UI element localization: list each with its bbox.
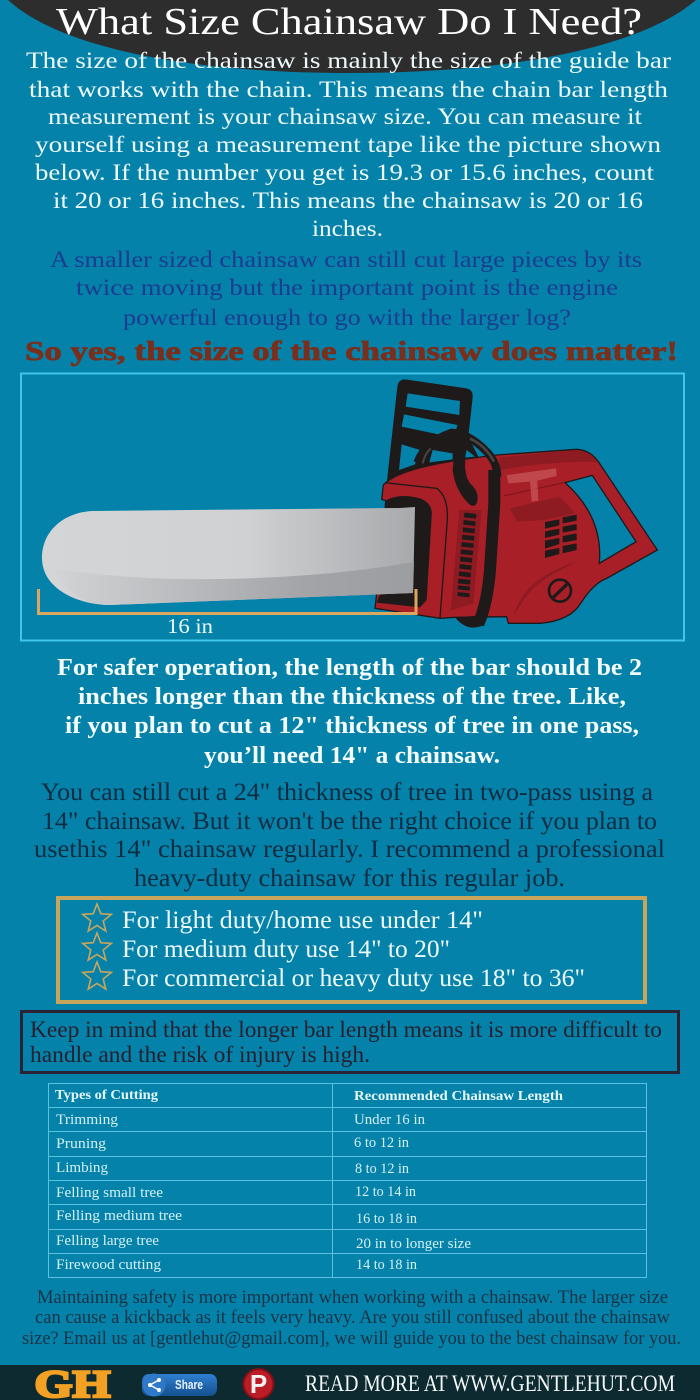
trigger [453, 445, 478, 506]
stop switch [549, 580, 571, 602]
footer bar [0, 1363, 700, 1400]
text block: intro paragraph: inches. [312, 216, 383, 242]
text block: intro paragraph: below. If the number you get is 19.3 or 15.6 inches, count [35, 160, 655, 186]
vent slats [457, 513, 476, 597]
table header [55, 1088, 563, 1104]
text block: intro paragraph: The size of the chainsaw is mainly the size of the guide bar [26, 48, 671, 74]
row: felling medium tree: 16 to 18 in [356, 1211, 418, 1227]
T-shape mark [507, 468, 557, 502]
text block: intro paragraph [26, 48, 671, 242]
icon: pinterest [244, 1369, 274, 1399]
side vent strip [451, 510, 482, 611]
measure label: 16 in [167, 614, 214, 638]
row: firewood cutting [56, 1257, 418, 1273]
icon: guide bar [42, 507, 415, 605]
mouth [377, 496, 432, 607]
title: What Size Chainsaw Do I Need? [56, 1, 642, 43]
row: trimming [56, 1112, 426, 1128]
icon: pinterest: P [250, 1369, 267, 1399]
front bar of handle [478, 470, 494, 624]
text block: safer operation advice: inches longer than the thickness of the tree. Like, [78, 684, 626, 710]
text block: safety closing note: size? Email us at [gentlehut@gmail.com], we will guide you to the best chainsaw for you. [22, 1329, 681, 1349]
row: pruning: Pruning [56, 1136, 106, 1152]
table: recommended chainsaw length [48, 1083, 647, 1278]
panel: duty recommendations [58, 898, 645, 1002]
text block: safer operation advice: For safer operation, the length of the bar should be 2 [57, 655, 642, 681]
text block: blue note: powerful enough to go with the larger log? [123, 305, 571, 331]
text block: two-pass paragraph: You can still cut a 24" thickness of tree in two-pass using a [41, 777, 653, 806]
row: limbing: Limbing [56, 1160, 108, 1176]
text block: safety closing note [22, 1288, 681, 1349]
row: firewood cutting: 14 to 18 in [356, 1257, 418, 1273]
text block: safer operation advice [57, 655, 642, 769]
text block: two-pass paragraph: usethis 14" chainsaw regularly. I recommend a professional [34, 834, 665, 863]
text block: two-pass paragraph [34, 777, 665, 892]
measure bracket [38, 589, 416, 614]
text block: intro paragraph: measurement is your chainsaw size. You can measure it [48, 104, 643, 130]
text block: two-pass paragraph: heavy-duty chainsaw for this regular job. [134, 863, 565, 892]
callout: longer bar warning: Keep in mind that the longer bar length means it is more difficult to [30, 1017, 662, 1043]
row: felling small tree: 12 to 14 in [355, 1184, 417, 1200]
list item: medium duty: For medium duty use 14" to 20" [122, 934, 450, 963]
row: felling large tree: 20 in to longer size [356, 1236, 471, 1252]
nose line [385, 483, 447, 618]
row: felling small tree [56, 1184, 417, 1201]
text block: intro paragraph: yourself using a measurement tape like the picture shown [35, 132, 661, 158]
text block: safer operation advice: if you plan to cut a 12" thickness of tree in one pass, [65, 713, 639, 739]
icon: star 2 [83, 933, 111, 960]
row: felling medium tree: Felling medium tree [56, 1208, 182, 1224]
panel: chainsaw illustration [21, 374, 684, 640]
table header: Recommended Chainsaw Length [354, 1089, 563, 1104]
icon: chainsaw body [375, 379, 657, 628]
row: felling large tree: Felling large tree [56, 1233, 159, 1249]
text block: intro paragraph: it 20 or 16 inches. This means the chainsaw is 20 or 16 [53, 188, 643, 214]
text block: safer operation advice: you’ll need 14" a chainsaw. [204, 743, 500, 769]
row: trimming: Trimming [56, 1112, 118, 1128]
grille [545, 515, 577, 558]
main body [375, 449, 657, 623]
icon: star 1 [83, 904, 111, 931]
callout: longer bar warning [22, 1012, 678, 1072]
row: felling medium tree [56, 1208, 418, 1227]
rear window [565, 475, 636, 563]
row: felling large tree [56, 1233, 471, 1252]
table header: Types of Cutting [55, 1088, 158, 1103]
row: trimming: Under 16 in [354, 1112, 426, 1128]
swoosh [513, 561, 581, 617]
icon: star 3 [83, 962, 111, 989]
list item: light duty: For light duty/home use under 14" [122, 905, 483, 934]
heading: red statement: So yes, the size of the chainsaw does matter! [25, 336, 678, 366]
top shade [499, 450, 598, 470]
list item: heavy duty: For commercial or heavy duty use 18" to 36" [122, 963, 585, 992]
text block: intro paragraph: that works with the chain. This means the chain bar length [29, 77, 668, 103]
row: limbing [56, 1160, 410, 1177]
row: limbing: 8 to 12 in [355, 1161, 410, 1177]
dark patch [510, 497, 575, 522]
arc of top handle [417, 433, 497, 477]
row: pruning [56, 1135, 410, 1152]
callout: longer bar warning: handle and the risk of injury is high. [30, 1042, 370, 1068]
header: dark ellipse with title [8, 0, 696, 73]
button: share [142, 1374, 217, 1396]
row: firewood cutting: Firewood cutting [56, 1257, 161, 1273]
text block: safety closing note: Maintaining safety is more important when working with a chainsaw. The larger size [37, 1288, 668, 1308]
button: share: Share [175, 1378, 203, 1392]
text block: blue note: A smaller sized chainsaw can still cut large pieces by its [50, 247, 642, 273]
row: felling small tree: Felling small tree [56, 1185, 163, 1201]
front guard [387, 379, 480, 483]
text block: blue note [50, 247, 642, 331]
text block: two-pass paragraph: 14" chainsaw. But it won't be the right choice if you plan to [42, 806, 657, 835]
row: pruning: 6 to 12 in [354, 1135, 410, 1151]
text block: blue note: twice moving but the important point is the engine [76, 275, 618, 301]
text block: safety closing note: can cause a kickback as it feels very heavy. Are you still confused about the chainsaw [35, 1308, 671, 1328]
